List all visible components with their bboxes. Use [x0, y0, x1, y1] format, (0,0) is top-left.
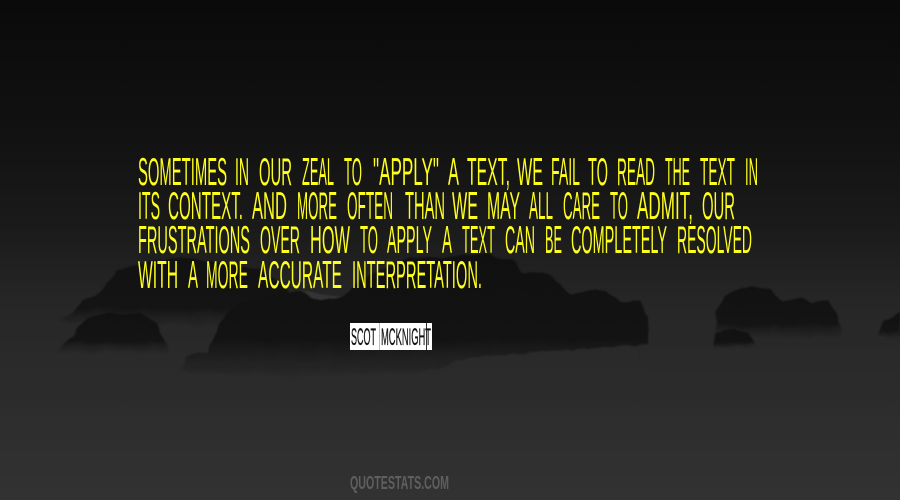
- quote line 2: AND: [252, 185, 287, 228]
- quote line 1: IN: [235, 151, 249, 194]
- quote line 3: FRUSTRATIONS: [138, 219, 250, 262]
- quote line 3: APPLY: [387, 219, 432, 262]
- quote line 2: ALL: [529, 185, 553, 228]
- quote line 3: COMPLETELY: [571, 219, 667, 262]
- quote line 2: WE: [452, 185, 478, 228]
- quote line 2: MORE: [297, 185, 337, 228]
- quote line 1: TEXT: [700, 151, 735, 194]
- quote line 2: [138, 185, 735, 228]
- quote line 2: OFTEN: [347, 185, 393, 228]
- quote line 2: MAY: [487, 185, 520, 228]
- background: mist band over the rock bases: [0, 350, 900, 394]
- quote text: INTERPRETATION.: [352, 254, 482, 297]
- quote line 2: ITS: [138, 185, 160, 228]
- quote line 2: ADMIT,: [637, 185, 693, 228]
- quote line 1: ZEAL: [302, 151, 334, 194]
- quote text: OUR: [702, 185, 735, 228]
- quote line 3: TEXT: [462, 219, 495, 262]
- quote line 2: TO: [610, 185, 628, 228]
- quote line 3: OVER: [260, 219, 300, 262]
- quote line 1: FAIL: [551, 151, 580, 194]
- quote line 3: CAN: [505, 219, 535, 262]
- quote line 2: THAN: [405, 185, 445, 228]
- text: RESOLVED: [677, 219, 752, 262]
- quote line 2: CONTEXT.: [168, 185, 243, 228]
- quote line 1: READ: [617, 151, 655, 194]
- author badge: SCOT: [351, 324, 376, 351]
- background: rocks in the mist: [57, 253, 900, 376]
- quote line 4: WITH: [138, 254, 178, 297]
- text: IN: [745, 151, 758, 194]
- quote line 2: CARE: [563, 185, 600, 228]
- quote line 1: THE: [665, 151, 690, 194]
- quote line 1: [138, 151, 758, 194]
- quote line 4: [138, 254, 482, 297]
- site credit: QUOTESTATS.COM: [350, 473, 449, 493]
- quote line 4: A: [188, 254, 198, 297]
- quote line 3: BE: [545, 219, 562, 262]
- quote line 3: [138, 219, 752, 262]
- quote line 1: OUR: [259, 151, 292, 194]
- text: MCKNIGHT: [381, 324, 431, 351]
- quote line 1: WE: [517, 151, 543, 194]
- quote line 4: ACCURATE: [258, 254, 342, 297]
- quote line 3: A: [442, 219, 452, 262]
- quote line 4: MORE: [206, 254, 248, 297]
- quote line 1: SOMETIMES: [138, 151, 227, 194]
- quote line 3: TO: [360, 219, 378, 262]
- quote text: [138, 151, 758, 297]
- quote line 1: A: [448, 151, 459, 194]
- quote line 1: "APPLY": [373, 151, 439, 194]
- quote line 1: TO: [588, 151, 608, 194]
- quote line 3: HOW: [310, 219, 350, 262]
- quote line 1: TO: [344, 151, 362, 194]
- quote line 1: TEXT,: [467, 151, 510, 194]
